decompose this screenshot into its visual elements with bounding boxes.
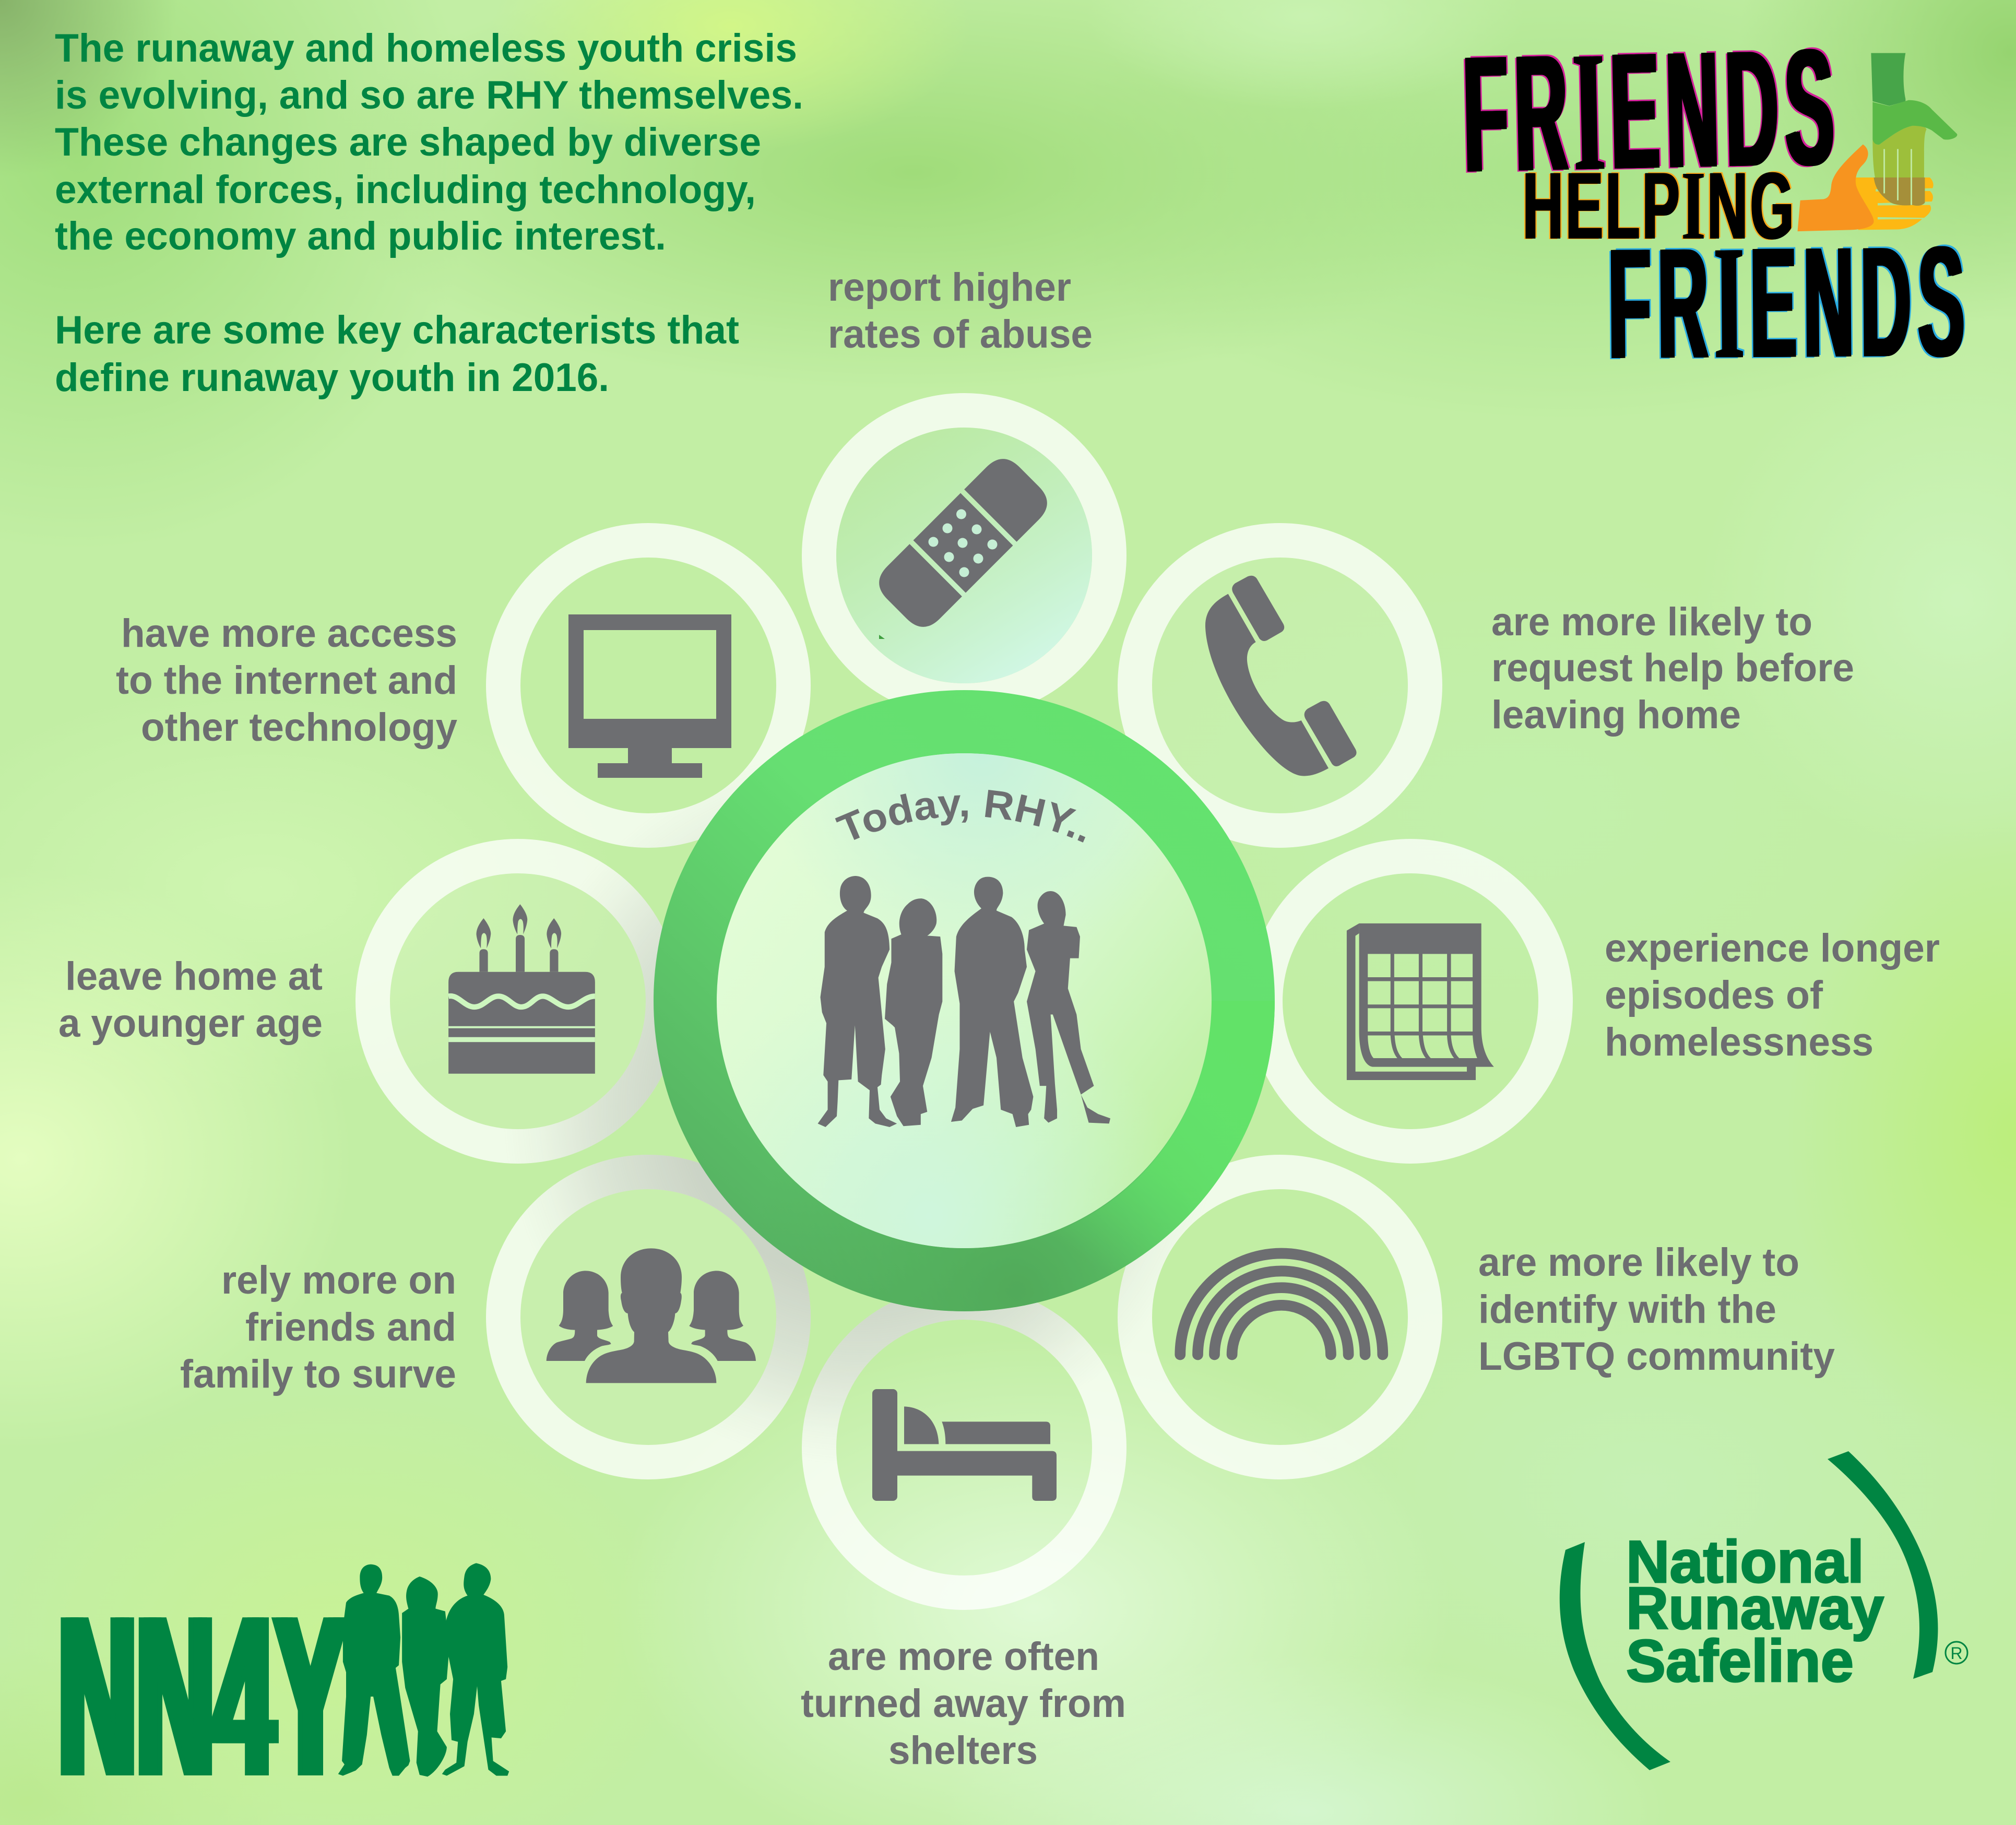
label: shelters: shelters [888, 1728, 1038, 1773]
icon: four youth silhouettes [818, 876, 1110, 1127]
label: shelters: turned away from [801, 1681, 1126, 1726]
label: LGBTQ: identify with the [1478, 1287, 1776, 1332]
label: longer homelessness: episodes of [1605, 973, 1823, 1017]
label: friends and family: family to surve [180, 1352, 456, 1396]
outer rings around the centre [355, 393, 1573, 1610]
label: friends and family: rely more on [221, 1258, 456, 1302]
intro text block: The runaway and homeless youth crisis [55, 26, 797, 70]
centre green ring and disc [654, 690, 1275, 1311]
intro text block: external forces, including technology, [55, 168, 756, 212]
logo: NN4Y lettering: NN4Y [58, 1568, 347, 1824]
logo: FRIENDS first line: FRIENDS [1462, 15, 1842, 207]
logo: National Runaway Safeline: Safeline [1626, 1628, 1854, 1694]
label: friends and family [180, 1258, 456, 1396]
icon: telephone handset [1205, 576, 1357, 776]
label: abuse [828, 265, 1093, 357]
intro text block: is evolving, and so are RHY themselves. [55, 73, 803, 117]
label: request help: leaving home [1491, 693, 1741, 737]
label: shelters: are more often [828, 1634, 1099, 1679]
label: friends and family: friends and [245, 1305, 456, 1349]
icon: computer monitor [568, 614, 731, 778]
intro text block [55, 26, 803, 400]
label: request help: are more likely to [1491, 600, 1812, 644]
icon: bandage [871, 451, 1056, 639]
label: internet access: other technology [141, 705, 457, 750]
logo: National Runaway Safeline: R [1950, 1644, 1963, 1663]
logo: National Runaway Safeline [1560, 1451, 1967, 1770]
label: younger age: leave home at [65, 954, 323, 999]
icon: three people busts [547, 1248, 756, 1383]
logo: helping hands [1798, 53, 1957, 231]
label: longer homelessness: experience longer [1605, 926, 1940, 970]
label: abuse: report higher [828, 265, 1071, 310]
logo: HELPING line: HELPING [1523, 150, 1796, 260]
label: request help: request help before [1491, 646, 1854, 690]
centre heading: Today, RHY..: Today, RHY.. [835, 790, 1086, 843]
label: internet access: have more access [121, 611, 457, 656]
logo: NN4Y silhouettes [338, 1563, 509, 1776]
label: internet access [116, 611, 457, 750]
label: younger age [58, 954, 323, 1046]
label: younger age: a younger age [58, 1001, 323, 1046]
icon: bed [872, 1389, 1057, 1501]
intro text block: define runaway youth in 2016. [55, 355, 609, 400]
label: longer homelessness [1605, 926, 1940, 1064]
label: LGBTQ: are more likely to [1478, 1240, 1799, 1285]
label: LGBTQ [1478, 1240, 1835, 1379]
intro text block: Here are some key characterists that [55, 308, 739, 352]
intro text block: These changes are shaped by diverse [55, 120, 761, 164]
label: internet access: to the internet and [116, 658, 457, 703]
logo: FRIENDS second line: FRIENDS [1608, 211, 1972, 393]
centre heading: Today, RHY.. [835, 790, 1086, 843]
icon: birthday cake [448, 904, 595, 1074]
intro text block: the economy and public interest. [55, 214, 666, 258]
label: request help [1491, 600, 1854, 737]
icon: calendar [1347, 923, 1494, 1080]
label: longer homelessness: homelessness [1605, 1020, 1873, 1064]
logo: National Runaway Safeline: National [1626, 1529, 1864, 1595]
label: abuse: rates of abuse [828, 312, 1093, 357]
logo: National Runaway Safeline: Runaway [1626, 1575, 1884, 1642]
label: LGBTQ: LGBTQ community [1478, 1334, 1835, 1379]
icon: rainbow [1180, 1253, 1383, 1355]
label: shelters [801, 1634, 1126, 1773]
